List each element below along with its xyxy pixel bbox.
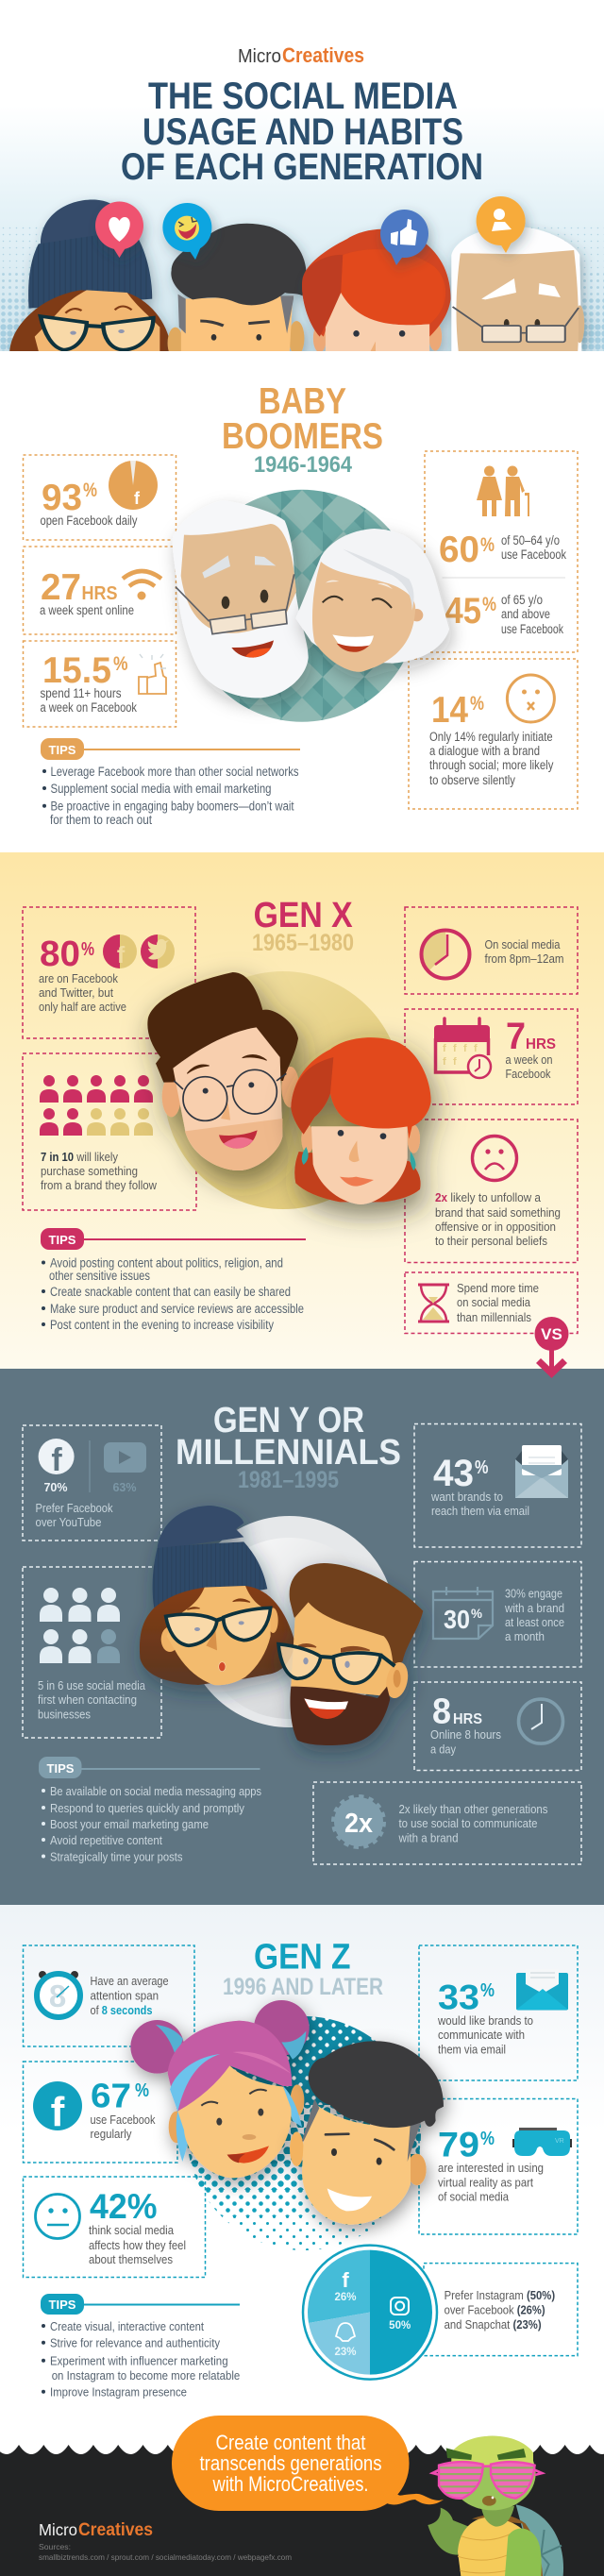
- box: facebook over youtube: [23, 1425, 161, 1541]
- box: more time than millennials: than millennials: [457, 1310, 531, 1324]
- box: 2x likely: 2x: [344, 1809, 373, 1839]
- box: 15.5 percent: [23, 641, 176, 727]
- tips: gen z: [41, 2294, 240, 2399]
- tips: baby boomers: for them to reach out: [50, 813, 152, 827]
- box: 14 percent: through social; more likely: [429, 758, 554, 772]
- box: 8 hours: a day: [430, 1743, 456, 1756]
- title: USAGE AND HABITS: [143, 111, 463, 153]
- box: 60 and 45 percent: use Facebook: [501, 622, 563, 636]
- footer logo: Creatives: [78, 2520, 153, 2540]
- box: 30 percent: [414, 1561, 581, 1667]
- box: 42 percent: affects how they feel: [89, 2239, 186, 2252]
- tips: baby boomers: Be proactive in engaging baby boomers—don’t wait: [51, 800, 294, 814]
- box: 79 percent: of social media: [438, 2190, 509, 2203]
- panel: gen z: [0, 1905, 604, 2399]
- box: 8 second attention span: 8: [49, 1978, 66, 2013]
- arrow: vs marker: VS: [541, 1325, 562, 1343]
- tips: gen z: on Instagram to become more relatable: [52, 2369, 240, 2382]
- box: 8 hours: 8: [432, 1692, 451, 1731]
- heading: gen x: GEN X: [254, 896, 353, 935]
- bubble: heart: [95, 202, 143, 258]
- box: 7 hours: [405, 1009, 578, 1104]
- white band below the header heads: [0, 351, 604, 385]
- box: 7 hours: f: [453, 1056, 457, 1068]
- box: 8 second attention span: of 8 seconds: [91, 2004, 153, 2017]
- box: 33 percent: communicate with: [438, 2029, 525, 2042]
- tips: baby boomers: [41, 738, 300, 827]
- tips: gen z: Create visual, interactive content: [50, 2320, 204, 2333]
- box: clock 8pm to 12am: [405, 907, 578, 994]
- box: 2x likely to unfollow: offensive or in opposition: [435, 1220, 556, 1234]
- box: 30 percent: %: [471, 1606, 483, 1621]
- box: 60 and 45 percent: 60: [439, 530, 479, 570]
- tips: millennials: Boost your email marketing game: [50, 1817, 209, 1831]
- box: 14 percent: to observe silently: [429, 773, 515, 787]
- logo: [238, 43, 364, 67]
- box: more time than millennials: [405, 1272, 578, 1333]
- box: 93 percent: [23, 455, 176, 540]
- pie chart: platform preference: 23%: [334, 2347, 357, 2358]
- box: 79 percent: virtual reality as part: [438, 2177, 533, 2190]
- call to action speech bubble: transcends generations: [200, 2451, 381, 2475]
- illustration: gen x woman: [291, 1037, 431, 1204]
- box: 43 percent: reach them via email: [431, 1504, 529, 1518]
- years 1981-1995: 1981–1995: [238, 1467, 339, 1493]
- box: 33 percent: %: [480, 1980, 495, 2001]
- box: 93 percent: f: [134, 489, 141, 508]
- box: 15.5 percent: %: [113, 653, 128, 675]
- heading: baby boomers: BOOMERS: [222, 416, 383, 457]
- logo: Micro: [238, 46, 281, 67]
- box: 60 and 45 percent: %: [480, 534, 495, 556]
- box: 30 percent: 30: [444, 1605, 470, 1634]
- head: girl with beanie: [9, 200, 172, 351]
- box: 60 and 45 percent: %: [482, 594, 496, 615]
- box: 60 and 45 percent: use Facebook: [501, 547, 566, 562]
- box: 30 percent: with a brand: [504, 1601, 564, 1615]
- tips: millennials: Be available on social media messaging apps: [50, 1784, 261, 1798]
- diamond circle backdrop: [186, 490, 418, 722]
- box: 60 and 45 percent: 45: [445, 591, 481, 631]
- heading: gen y or millennials: MILLENNIALS: [176, 1433, 401, 1473]
- box: 2x likely to unfollow: to their personal beliefs: [435, 1234, 547, 1248]
- box: 43 percent: 43: [433, 1453, 474, 1494]
- box: 2x likely: 2x likely than other generations: [398, 1802, 548, 1816]
- sources: [39, 2542, 292, 2562]
- box: 7 hours: f: [474, 1043, 478, 1054]
- pie chart: platform preference: f: [342, 2268, 349, 2292]
- box: 43 percent: %: [475, 1457, 489, 1478]
- call to action speech bubble: with MicroCreatives.: [212, 2472, 368, 2496]
- years 1946-1964: 1946-1964: [254, 452, 353, 478]
- box: 43 percent: [414, 1423, 581, 1547]
- footer panel: [0, 2416, 604, 2576]
- call to action speech bubble: [172, 2416, 444, 2511]
- box: 7 in 10: 7 in 10 will likely: [41, 1150, 118, 1164]
- box: 42 percent: about themselves: [89, 2253, 173, 2266]
- heading: gen y or millennials: [176, 1401, 401, 1473]
- box: 42 percent: [23, 2177, 206, 2277]
- illustration: old woman: [295, 529, 449, 672]
- heading: gen y or millennials: GEN Y OR: [213, 1401, 364, 1440]
- box: 7 in 10: purchase something: [41, 1164, 138, 1178]
- box: facebook over youtube: 70%: [43, 1481, 68, 1494]
- box: 15.5 percent: a week on Facebook: [40, 700, 137, 715]
- illustration: gen z girl: [130, 2000, 310, 2178]
- box: 7 in 10: [23, 1053, 196, 1210]
- box: 7 hours: a week on: [506, 1052, 553, 1067]
- box: 43 percent: want brands to: [430, 1490, 503, 1504]
- box: 30 percent: at least once: [505, 1615, 564, 1629]
- box: 67 percent: f: [51, 2089, 65, 2135]
- tips: gen x: Create snackable content that can easily be shared: [50, 1285, 291, 1299]
- box: 80 percent: 80: [40, 934, 80, 974]
- illustration: old man: [173, 500, 309, 698]
- box: 67 percent: regularly: [91, 2128, 132, 2141]
- illustration: millennial woman: [140, 1506, 295, 1685]
- box: 2x likely to unfollow: 2x likely to unfollow a: [435, 1190, 542, 1204]
- panel: gen x: [0, 852, 604, 1369]
- tips: millennials: [39, 1757, 261, 1863]
- box: 93 percent: open Facebook daily: [40, 514, 138, 528]
- tips: millennials: TIPS: [47, 1761, 75, 1776]
- box: facebook over youtube: Prefer Facebook: [36, 1501, 113, 1515]
- box: 79 percent: 79: [438, 2126, 479, 2164]
- icon: elderly couple: [477, 466, 529, 516]
- box: 93 percent: 93: [42, 478, 82, 518]
- box: 27 hours: HRS: [81, 583, 117, 604]
- box: 8 hours: [414, 1682, 581, 1771]
- icon: vr goggles: [512, 2128, 572, 2156]
- icon: vr goggles: VR: [555, 2138, 564, 2145]
- box: 80 percent: and Twitter, but: [39, 985, 113, 1000]
- illustration: millennial man: [278, 1563, 423, 1745]
- box: facebook over youtube: 63%: [112, 1481, 137, 1494]
- box: 67 percent: [23, 2062, 177, 2163]
- panel: gen y or millennials: [0, 1317, 604, 1905]
- box: 14 percent: Only 14% regularly initiate: [429, 730, 553, 744]
- heading: baby boomers: [222, 381, 383, 457]
- tips: gen x: other sensitive issues: [49, 1269, 150, 1283]
- box: 15.5 percent: 15.5: [42, 650, 111, 691]
- white plate backdrop: [184, 1516, 395, 1727]
- box: clock 8pm to 12am: On social media: [485, 937, 561, 951]
- box: 8 second attention span: attention span: [91, 1990, 159, 2003]
- box: facebook over youtube: f: [51, 1442, 62, 1478]
- box: 80 percent: only half are active: [39, 1000, 126, 1014]
- box: more time than millennials: Spend more time: [457, 1281, 539, 1295]
- title: THE SOCIAL MEDIA: [148, 76, 458, 117]
- arrow: vs marker: [534, 1317, 568, 1378]
- bubble: user: [477, 196, 526, 253]
- header section: [0, 0, 604, 359]
- heading: gen z: GEN Z: [254, 1937, 351, 1977]
- tips: baby boomers: TIPS: [49, 743, 76, 757]
- years 1996 and later: 1996 AND LATER: [223, 1974, 383, 2000]
- box: 33 percent: would like brands to: [437, 2014, 533, 2028]
- box: 60 and 45 percent: [425, 451, 578, 652]
- box: 67 percent: %: [135, 2080, 149, 2101]
- box: 2x likely: [313, 1782, 581, 1864]
- box: 42 percent: think social media: [89, 2224, 174, 2237]
- box: 27 hours: 27: [41, 567, 81, 608]
- box: 67 percent: use Facebook: [91, 2113, 156, 2127]
- head: old man: [451, 227, 584, 351]
- head: boy with dark hair: [168, 224, 307, 359]
- tips: millennials: Avoid repetitive content: [50, 1833, 162, 1847]
- sources: Sources:: [39, 2542, 71, 2551]
- illustration: gen z boy: [290, 2041, 444, 2225]
- bubble: laughing emoji: [162, 203, 211, 260]
- tips: gen x: Avoid posting content about politics, religion, and: [50, 1255, 283, 1271]
- box: 42 percent: 42%: [90, 2187, 157, 2226]
- box: 60 and 45 percent: of 65 y/o: [501, 593, 543, 607]
- footer logo: [39, 2520, 153, 2540]
- footer logo: Micro: [39, 2520, 77, 2539]
- title: OF EACH GENERATION: [121, 146, 483, 188]
- panel: baby boomers: [23, 381, 578, 827]
- sources: smallbiztrends.com / sprout.com / socialmediatoday.com / webpagefx.com: [39, 2552, 292, 2562]
- box: 80 percent: f: [117, 942, 126, 968]
- box: 7 in 10: from a brand they follow: [41, 1178, 158, 1192]
- years 1965-1980: 1965–1980: [252, 930, 354, 956]
- box: clock 8pm to 12am: from 8pm–12am: [485, 951, 564, 966]
- box: 8 hours: Online 8 hours: [430, 1727, 501, 1742]
- box: 7 hours: HRS: [526, 1036, 556, 1052]
- tips: gen x: TIPS: [49, 1233, 76, 1247]
- box: 7 hours: f: [463, 1043, 467, 1054]
- title: [121, 76, 483, 188]
- box: prefer instagram: [424, 2264, 578, 2356]
- box: 8 hours: HRS: [453, 1711, 482, 1727]
- heading: baby boomers: BABY: [259, 381, 346, 422]
- tips: gen z: TIPS: [49, 2298, 76, 2312]
- icon row: people seven of ten: [40, 1075, 153, 1136]
- box: 79 percent: are interested in using: [438, 2162, 544, 2175]
- box: 14 percent: a dialogue with a brand: [429, 744, 540, 758]
- box: 27 hours: a week spent online: [40, 603, 134, 617]
- box: 5 in 6: businesses: [38, 1707, 91, 1722]
- box: 5 in 6: [23, 1567, 161, 1738]
- box: prefer instagram: Prefer Instagram (50%): [445, 2289, 555, 2302]
- mascot: turtle with shutter shades: [428, 2436, 563, 2576]
- tips: millennials: Strategically time your posts: [50, 1850, 183, 1863]
- tips: baby boomers: Leverage Facebook more than other social networks: [51, 765, 299, 779]
- logo: Creatives: [282, 43, 364, 67]
- box: 14 percent: [409, 659, 578, 809]
- box: 7 hours: f: [443, 1056, 446, 1068]
- tips: gen x: Make sure product and service reviews are accessible: [50, 1302, 304, 1316]
- box: 79 percent: [419, 2099, 578, 2234]
- box: 33 percent: 33: [438, 1978, 479, 2016]
- box: 2x likely: to use social to communicate: [398, 1816, 538, 1830]
- box: 5 in 6: 5 in 6 use social media: [38, 1678, 146, 1692]
- box: 15.5 percent: spend 11+ hours: [40, 686, 122, 700]
- box: 2x likely to unfollow: brand that said something: [435, 1205, 561, 1220]
- box: 33 percent: them via email: [438, 2043, 506, 2056]
- box: 2x likely: with a brand: [398, 1831, 459, 1844]
- box: 5 in 6: first when contacting: [38, 1692, 137, 1707]
- box: 79 percent: %: [480, 2129, 495, 2149]
- pie chart: platform preference: 26%: [334, 2292, 357, 2303]
- box: 60 and 45 percent: and above: [501, 607, 550, 621]
- box: prefer instagram: over Facebook (26%): [445, 2303, 545, 2316]
- pie chart: platform preference: [303, 2246, 437, 2380]
- bubble: thumbs up: [380, 210, 428, 265]
- box: 14 percent: %: [470, 693, 484, 715]
- box: 14 percent: 14: [431, 690, 468, 731]
- box: prefer instagram: and Snapchat (23%): [445, 2318, 542, 2332]
- box: more time than millennials: on social media: [457, 1295, 531, 1309]
- box: 2x likely to unfollow: [405, 1120, 578, 1263]
- tips: millennials: Respond to queries quickly and promptly: [50, 1801, 244, 1815]
- box: 93 percent: %: [83, 480, 97, 501]
- tips: gen z: Improve Instagram presence: [50, 2386, 187, 2399]
- tips: gen z: Experiment with influencer marketing: [50, 2355, 228, 2368]
- box: 67 percent: 67: [91, 2077, 131, 2114]
- box: 8 second attention span: [23, 1945, 194, 2046]
- tips: baby boomers: Supplement social media with email marketing: [51, 782, 272, 796]
- box: 60 and 45 percent: of 50–64 y/o: [501, 533, 560, 547]
- gold circle backdrop: [164, 971, 402, 1209]
- halftone circle backdrop: [187, 2016, 421, 2250]
- box: 7 hours: f: [453, 1043, 457, 1054]
- box: 80 percent: are on Facebook: [39, 971, 118, 985]
- box: 7 hours: Facebook: [506, 1067, 551, 1081]
- head: red-haired woman: [302, 229, 451, 352]
- box: 30 percent: a month: [505, 1629, 545, 1643]
- box: 7 hours: f: [443, 1043, 446, 1054]
- tips: gen x: Post content in the evening to increase visibility: [50, 1318, 274, 1332]
- illustration: gen x man: [147, 972, 299, 1170]
- pie chart: platform preference: 50%: [389, 2320, 411, 2332]
- box: 7 hours: 7: [506, 1016, 526, 1057]
- box: 80 percent: [23, 907, 195, 1038]
- tips: gen z: Strive for relevance and authenticity: [50, 2337, 221, 2350]
- box: 30 percent: 30% engage: [505, 1586, 562, 1601]
- tips: gen x: [41, 1228, 306, 1332]
- box: 8 second attention span: Have an average: [91, 1975, 169, 1988]
- box: 80 percent: %: [81, 939, 94, 960]
- box: facebook over youtube: over YouTube: [36, 1515, 102, 1529]
- box: 33 percent: [419, 1945, 578, 2080]
- box: 27 hours: [23, 547, 176, 634]
- call to action speech bubble: Create content that: [215, 2431, 366, 2454]
